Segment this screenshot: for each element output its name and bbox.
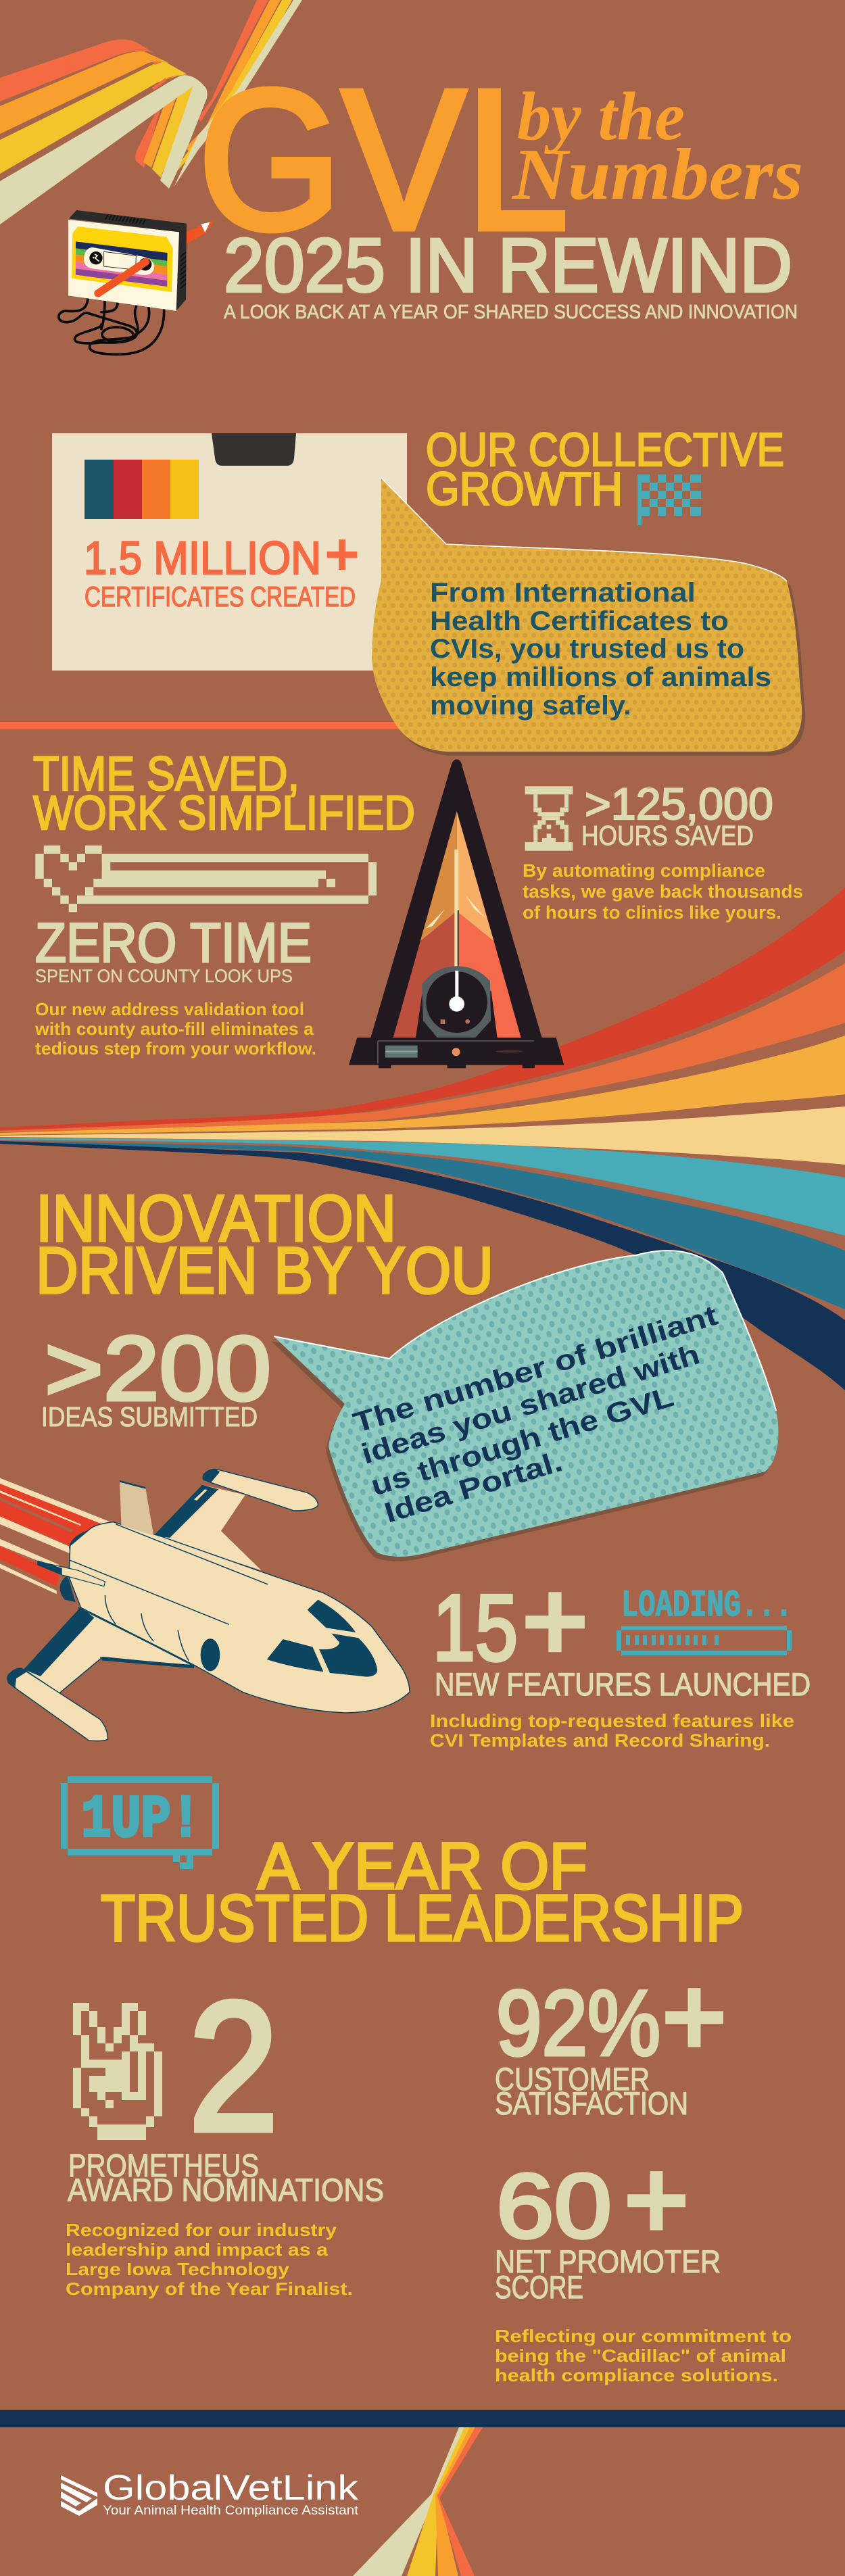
heading: innovation driven by you: DRIVEN BY YOU bbox=[36, 1234, 493, 1307]
callout text bbox=[430, 578, 771, 721]
callout text: Health Certificates to bbox=[430, 606, 729, 636]
stat: 1.5 million+: 1.5 MILLION bbox=[84, 532, 321, 584]
heading: time saved, work simplified: WORK SIMPLIFIED bbox=[33, 787, 415, 840]
text block: cadillac: health compliance solutions. bbox=[495, 2365, 778, 2385]
text block: address validation bbox=[34, 999, 316, 1059]
logo wordmark: GlobalVetLink bbox=[103, 2469, 359, 2508]
heading: our collective growth: OUR COLLECTIVE bbox=[426, 423, 784, 476]
callout: yellow speech bubble bbox=[372, 478, 805, 756]
orange divider line bbox=[0, 722, 402, 729]
stat: 1.5 million+: + bbox=[324, 520, 360, 587]
callout text: keep millions of animals bbox=[430, 662, 771, 692]
label: net promoter score: SCORE bbox=[495, 2269, 583, 2305]
stat: 92%+: 92% bbox=[496, 1972, 660, 2075]
stat: 92%+ bbox=[496, 1951, 728, 2081]
subtitle: A LOOK BACK AT A YEAR OF SHARED SUCCESS AND INNOVATION bbox=[224, 301, 798, 323]
stat: 200: >200 bbox=[45, 1317, 271, 1419]
label: spent on county look ups: SPENT ON COUNTY LOOK UPS bbox=[35, 966, 293, 986]
heading: our collective growth bbox=[426, 423, 784, 515]
colour bars bbox=[84, 460, 199, 519]
icon: spaceship with exhaust bbox=[0, 1469, 410, 1741]
stat: 60+: 60 bbox=[496, 2155, 612, 2257]
icon: 1UP pixel speech bubble bbox=[61, 1776, 219, 1869]
label: prometheus award nominations: PROMETHEUS bbox=[68, 2147, 259, 2183]
text block: automating compliance bbox=[523, 860, 803, 923]
icon: progress bar bbox=[617, 1626, 792, 1655]
title: Numbers: Numbers bbox=[512, 135, 803, 215]
icon: pixel peace hand bbox=[73, 2003, 162, 2140]
stat: 15+ bbox=[433, 1555, 589, 1687]
label: customer satisfaction: CUSTOMER bbox=[495, 2061, 650, 2097]
text block: cadillac: being the "Cadillac" of animal bbox=[495, 2346, 786, 2366]
text block: new features detail bbox=[430, 1711, 794, 1751]
icon: checkered flag bbox=[637, 475, 701, 525]
heading: innovation driven by you: INNOVATION bbox=[36, 1182, 396, 1255]
callout text: The number of brilliant bbox=[349, 1299, 721, 1439]
text block: address validation: Our new address validation tool bbox=[35, 999, 304, 1019]
callout text: From International bbox=[430, 578, 696, 608]
callout text: Idea Portal. bbox=[381, 1445, 566, 1529]
text block: new features detail: CVI Templates and Record Sharing. bbox=[430, 1730, 770, 1751]
label: net promoter score: NET PROMOTER bbox=[495, 2243, 721, 2279]
clipboard clip bbox=[212, 433, 296, 466]
stat: 15+: 15 bbox=[433, 1576, 518, 1680]
text block: cadillac bbox=[495, 2326, 792, 2385]
logo tagline: Your Animal Health Compliance Assistant bbox=[103, 2504, 359, 2518]
icon: 1UP pixel speech bubble: 1UP! bbox=[81, 1787, 201, 1854]
label: certificates created: CERTIFICATES CREATED bbox=[84, 581, 356, 612]
label: pixel loading text: LOADING... bbox=[621, 1584, 792, 1627]
stat: 2: 2 bbox=[189, 1964, 279, 2169]
stat: 125,000: >125,000 bbox=[585, 779, 773, 829]
colourful ribbons sweeping across the page bbox=[0, 888, 845, 1390]
text block: industry leadership bbox=[66, 2220, 353, 2299]
text block: new features detail: Including top-requested features like bbox=[430, 1711, 794, 1731]
text block: industry leadership: Recognized for our industry bbox=[66, 2220, 337, 2240]
text block: automating compliance: tasks, we gave back thousands bbox=[523, 881, 803, 902]
text block: industry leadership: Company of the Year Finalist. bbox=[66, 2279, 353, 2299]
stat: 60+: + bbox=[623, 2135, 690, 2264]
title: by the: by the bbox=[517, 78, 685, 155]
heading: innovation driven by you bbox=[36, 1182, 493, 1307]
label: prometheus award nominations: AWARD NOMINATIONS bbox=[68, 2172, 384, 2208]
label: hours saved: HOURS SAVED bbox=[581, 820, 754, 851]
header ribbon stripes bbox=[0, 0, 302, 224]
icon: pixel heart battery bbox=[35, 846, 377, 912]
title: GVL: GVL bbox=[198, 48, 569, 271]
heading: our collective growth: GROWTH bbox=[426, 462, 623, 515]
navy footer bar bbox=[0, 2410, 845, 2427]
logo: GlobalVetLink bbox=[61, 2469, 359, 2518]
logo mark bbox=[61, 2475, 97, 2516]
callout text: us through the GVL bbox=[367, 1380, 677, 1502]
icon: cassette tape with pencil bbox=[59, 210, 214, 354]
heading: time saved, work simplified bbox=[33, 748, 415, 840]
callout text: moving safely. bbox=[430, 691, 631, 721]
text block: cadillac: Reflecting our commitment to bbox=[495, 2326, 792, 2346]
stat: zero time: ZERO TIME bbox=[35, 911, 312, 974]
stat: 15+: + bbox=[521, 1555, 589, 1687]
heading: a year of trusted leadership: TRUSTED LEADERSHIP bbox=[101, 1881, 744, 1955]
heading: a year of trusted leadership bbox=[101, 1829, 744, 1955]
callout text bbox=[349, 1299, 721, 1529]
heading: a year of trusted leadership: A YEAR OF bbox=[258, 1829, 587, 1903]
callout text: ideas you shared with bbox=[358, 1338, 703, 1470]
label: ideas submitted: IDEAS SUBMITTED bbox=[41, 1401, 258, 1432]
label: customer satisfaction bbox=[495, 2061, 688, 2121]
text block: address validation: tedious step from your workflow. bbox=[35, 1038, 316, 1059]
callout: teal speech bubble bbox=[271, 1250, 778, 1561]
icon: metronome bbox=[349, 759, 564, 1068]
footer ribbon stripes bbox=[353, 2427, 483, 2576]
text block: automating compliance: of hours to clinics like yours. bbox=[523, 902, 781, 923]
panel: certificates paper card bbox=[52, 433, 407, 671]
text block: automating compliance: By automating compliance bbox=[523, 860, 765, 881]
stat: 60+ bbox=[496, 2135, 690, 2264]
icon: pixel hourglass bbox=[525, 786, 573, 851]
label: net promoter score bbox=[495, 2243, 721, 2305]
label: customer satisfaction: SATISFACTION bbox=[495, 2085, 688, 2121]
text block: industry leadership: Large Iowa Technology bbox=[66, 2259, 290, 2279]
callout text: CVIs, you trusted us to bbox=[430, 634, 744, 664]
heading: time saved, work simplified: TIME SAVED, bbox=[33, 748, 299, 801]
text block: address validation: with county auto-fill eliminates a bbox=[34, 1019, 314, 1039]
heading: 2025 in rewind: 2025 IN REWIND bbox=[224, 223, 792, 308]
label: prometheus award nominations bbox=[68, 2147, 384, 2208]
text block: industry leadership: leadership and impact as a bbox=[66, 2239, 329, 2260]
stat: 92%+: + bbox=[660, 1951, 728, 2081]
